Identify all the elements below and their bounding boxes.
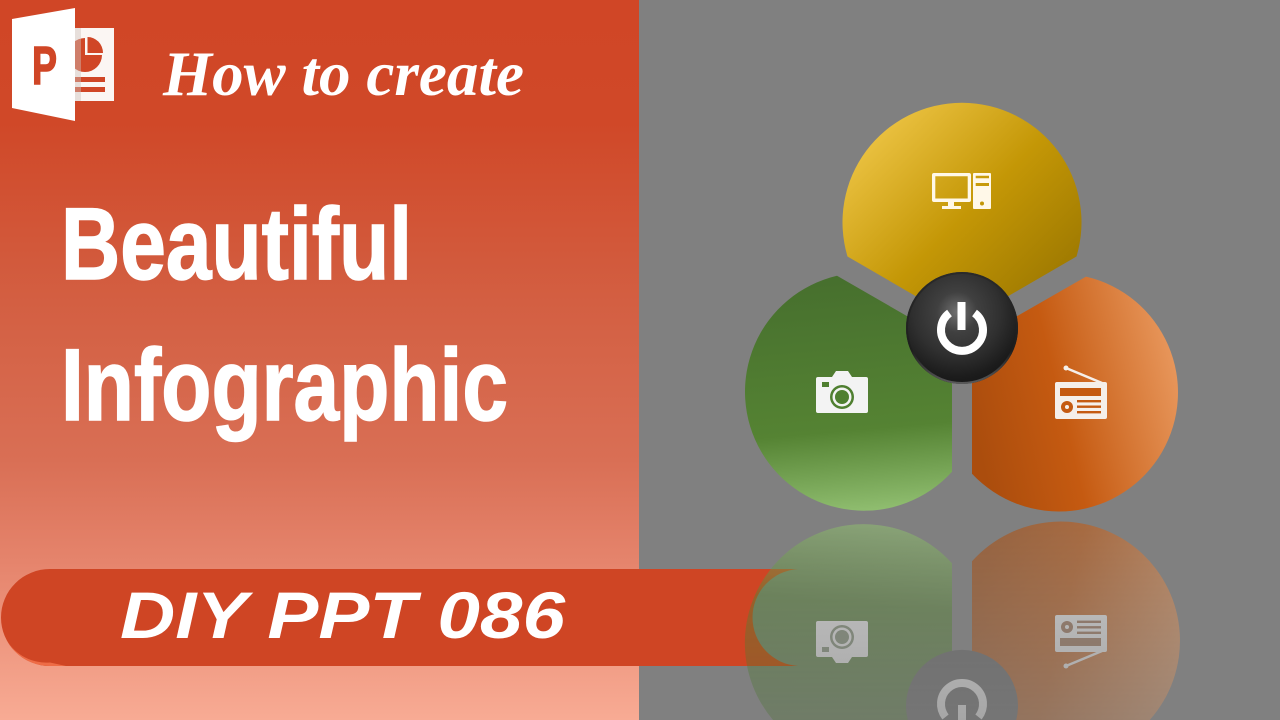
reflection of the infographic (745, 522, 1180, 720)
heading: How to create: How to create (162, 38, 524, 109)
icon: PowerPoint logo: P (32, 36, 57, 96)
panel: green petal (745, 276, 952, 511)
left red gradient panel (0, 0, 639, 720)
right grey background (639, 0, 1280, 720)
panel: yellow petal (842, 103, 1082, 323)
icon: camera (816, 371, 868, 413)
icon: radio (1055, 366, 1107, 419)
icon: desktop computer (932, 173, 991, 209)
title line: Infographic: Infographic (61, 328, 508, 442)
icon: PowerPoint logo (12, 8, 114, 121)
icon: central power button (906, 272, 1018, 384)
banner: DIY PPT 086 (1, 569, 798, 666)
title line: Beautiful: Beautiful (61, 187, 412, 301)
banner text: DIY PPT 086 (120, 578, 566, 652)
panel: orange petal (972, 277, 1178, 511)
